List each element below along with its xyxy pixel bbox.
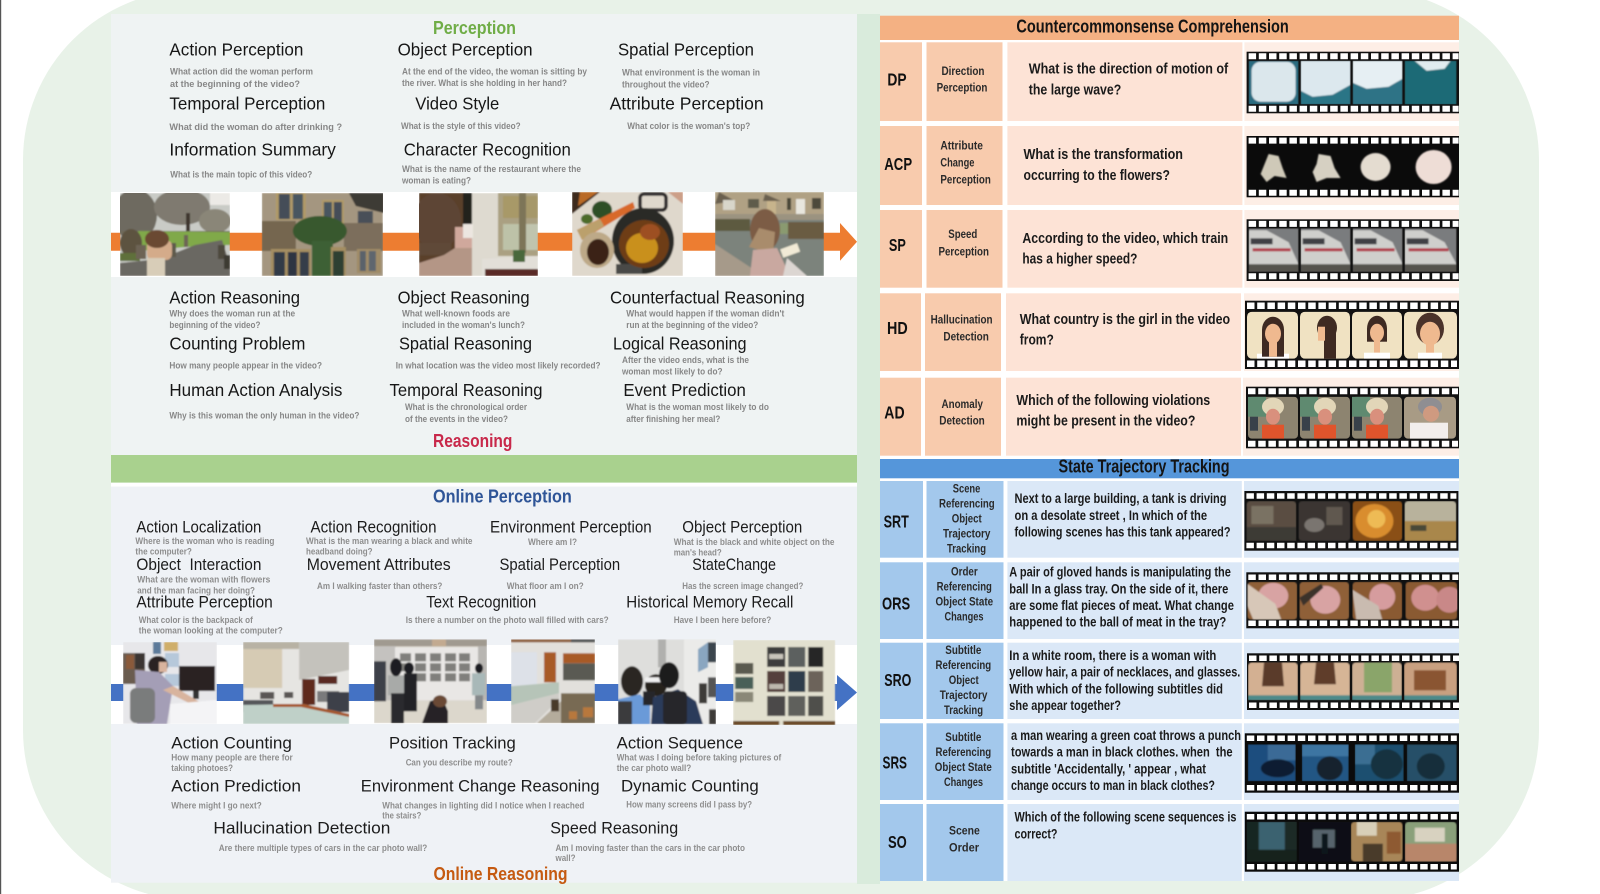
- task: Attribute Perception online: What color is the backpack of: [139, 614, 254, 625]
- row: SRO: Trajectory: [940, 688, 988, 702]
- row: ORS: Referencing: [937, 580, 992, 594]
- header: Countercommonsense Comprehension: [880, 16, 1459, 40]
- row: SO: [880, 804, 1459, 881]
- task: Action Perception: [169, 40, 313, 90]
- task: Object Perception online: Object Perception: [682, 519, 802, 537]
- row: ORS: are some flat pieces of meat. What change: [1009, 598, 1234, 613]
- task: Spatial Perception: [618, 40, 760, 91]
- task: Information Summary: [169, 140, 336, 181]
- task: Environment Change Reasoning: the stairs?: [382, 810, 422, 821]
- task: Action Perception: at the beginning of the video?: [170, 79, 300, 90]
- row: ACP: ACP: [884, 154, 912, 174]
- task: Speed Reasoning: Speed Reasoning: [550, 819, 678, 837]
- photo: group viewed from behind: [618, 639, 716, 724]
- panel: offline perception and reasoning: [111, 14, 857, 455]
- task: Event Prediction: [623, 380, 769, 425]
- film strip: selfie woman frames: [1246, 387, 1459, 448]
- header: State Trajectory Tracking: State Trajectory Tracking: [1058, 456, 1230, 476]
- row: SRS: a man wearing a green coat throws a punch: [1011, 728, 1241, 743]
- film strip: blue fight scene frames: [1245, 733, 1459, 793]
- task: Environment Change Reasoning: [361, 777, 600, 821]
- task: Attribute Perception online: [136, 593, 283, 636]
- row: SRO: she appear together?: [1009, 698, 1121, 713]
- row: SRT: Referencing: [939, 496, 995, 510]
- task: Speed Reasoning: wall?: [555, 852, 576, 863]
- task: Speed Reasoning: Am I moving faster than the cars in the car photo: [556, 842, 745, 853]
- task: Object Reasoning: Object Reasoning: [398, 288, 530, 308]
- task: Event Prediction: Event Prediction: [623, 380, 746, 400]
- row: ACP: [880, 126, 1459, 205]
- row: SRO: Tracking: [944, 703, 983, 717]
- task: Action Recognition: What is the man wearing a black and white: [306, 535, 472, 546]
- row: SP: Speed: [948, 227, 977, 241]
- task: Object Interaction: and the man facing her doing?: [137, 584, 255, 595]
- row: AD: [880, 378, 1459, 456]
- row: SO: Order: [949, 840, 979, 854]
- row: DP: Direction: [942, 64, 984, 78]
- task: Event Prediction: What is the woman most likely to do: [626, 402, 769, 413]
- task: Object Perception: [398, 40, 588, 89]
- row: HD: HD: [887, 318, 908, 338]
- task: Action Counting: [171, 735, 293, 773]
- task: Character Recognition: [401, 140, 581, 187]
- film strip: woman in tops frames: [1247, 653, 1459, 710]
- photo: atrium with stairs: [511, 639, 595, 724]
- row: SO: Scene: [949, 824, 980, 838]
- photo: woman drinking by window: [419, 193, 538, 276]
- row: SP: [880, 210, 1459, 288]
- heading: Perception: Perception: [433, 18, 516, 38]
- task: Attribute Perception online: Attribute Perception: [136, 593, 273, 611]
- task: Video Style: [401, 94, 521, 132]
- row: ORS: Changes: [944, 610, 984, 624]
- row: DP: What is the direction of motion of: [1029, 60, 1229, 77]
- task: Spatial Reasoning: [396, 334, 601, 372]
- row: HD: What country is the girl in the video: [1020, 311, 1230, 328]
- task: Spatial Perception: throughout the video?: [622, 80, 710, 91]
- row: SRO: [880, 643, 1459, 719]
- row: SP: has a higher speed?: [1022, 250, 1137, 267]
- heading: Online Perception: Online Perception: [433, 487, 572, 507]
- task: Action Perception: What action did the woman perform: [170, 67, 313, 78]
- task: Object Perception online: [674, 519, 834, 558]
- row: AD: Which of the following violations: [1016, 392, 1210, 409]
- task: Information Summary: What is the main topic of this video?: [170, 170, 312, 181]
- row: DP: Perception: [937, 81, 987, 95]
- task: Object Perception online: man's head?: [674, 547, 722, 558]
- task: Object Perception: Object Perception: [398, 40, 533, 60]
- task: Position Tracking: [389, 735, 516, 768]
- task: Action Sequence: Action Sequence: [617, 735, 743, 753]
- task: Action Localization: the computer?: [135, 546, 192, 557]
- task: Logical Reasoning: woman most likely to do?: [621, 367, 723, 378]
- row: ACP: Perception: [940, 172, 991, 186]
- row: SRO: SRO: [884, 670, 911, 690]
- task: Historical Memory Recall: Historical Memory Recall: [626, 593, 793, 611]
- task: Spatial Perception online: Spatial Perception: [500, 556, 620, 574]
- row: ORS: happened to the ball of meat in the tray?: [1009, 615, 1226, 630]
- task: Video Style: What is the style of this video?: [401, 121, 521, 132]
- row: DP: the large wave?: [1029, 81, 1121, 98]
- row: AD: might be present in the video?: [1016, 413, 1195, 430]
- task: Object Reasoning: [398, 288, 530, 331]
- photo: woman running in park: [120, 193, 230, 276]
- task: Text Recognition: Text Recognition: [426, 593, 536, 611]
- task: Hallucination Detection: Hallucination Detection: [213, 819, 390, 837]
- photo: woman at computer: [123, 642, 217, 724]
- row: SO: correct?: [1014, 827, 1058, 842]
- film strip: scene order frames: [1245, 812, 1459, 872]
- row: HD: [880, 293, 1459, 371]
- timeline strip: online video frames: [111, 639, 857, 725]
- task: Action Recognition: headband doing?: [306, 546, 373, 557]
- row: SRS: change occurs to man in black clothes?: [1011, 778, 1215, 793]
- panel: Countercommonsense Comprehension table: [880, 16, 1459, 459]
- task: Action Reasoning: Action Reasoning: [169, 288, 300, 308]
- row: SRO: Subtitle: [945, 643, 982, 657]
- task: Action Counting: How many people are there for: [171, 751, 293, 762]
- task: Position Tracking: Position Tracking: [389, 735, 516, 753]
- task: Hallucination Detection: Are there multiple types of cars in the car photo wall?: [219, 842, 428, 853]
- header: State Trajectory Tracking: [880, 456, 1459, 478]
- task: Counterfactual Reasoning: [610, 288, 805, 331]
- task: Counting Problem: [169, 334, 322, 372]
- row: SO: Which of the following scene sequences is: [1014, 810, 1236, 825]
- row: SRT: Next to a large building, a tank is driving: [1014, 491, 1226, 506]
- task: Action Sequence: What was I doing before taking pictures of: [617, 751, 782, 762]
- task: Text Recognition: Is there a number on the photo wall filled with cars?: [406, 614, 609, 625]
- row: SRS: [880, 723, 1459, 800]
- task: Action Sequence: the car photo wall?: [617, 762, 692, 773]
- task: Character Recognition: Character Recognition: [404, 140, 571, 160]
- task: Dynamic Counting: [621, 777, 759, 810]
- row: SRS: subtitle 'Accidentally, ' appear , what: [1011, 761, 1206, 776]
- task: Historical Memory Recall: Have I been here before?: [674, 614, 772, 625]
- row: ORS: Order: [951, 565, 978, 579]
- row: ORS: A pair of gloved hands is manipulating the: [1009, 565, 1231, 580]
- task: Action Reasoning: Why does the woman run at the: [169, 309, 295, 320]
- task: Action Reasoning: [169, 288, 300, 331]
- task: StateChange: StateChange: [692, 556, 776, 574]
- task: Action Sequence: [617, 735, 782, 773]
- row: SRT: Trajectory: [943, 526, 991, 540]
- photo: gallery atrium: [243, 642, 350, 724]
- row: SRT: on a desolate street , In which of the: [1014, 508, 1208, 523]
- task: Movement Attributes: [307, 556, 451, 591]
- task: Action Reasoning: beginning of the video?: [169, 320, 261, 331]
- row: SO: SO: [888, 832, 907, 852]
- film strip: wave frames: [1247, 52, 1459, 113]
- arrow: blue timeline: [111, 675, 857, 710]
- film strip: train frames: [1247, 219, 1459, 281]
- task: Dynamic Counting: Dynamic Counting: [621, 777, 759, 795]
- task: Object Interaction: What are the woman with flowers: [137, 574, 270, 585]
- task: Action Localization: Where is the woman who is reading: [135, 535, 275, 546]
- task: Temporal Reasoning: of the events in the video?: [405, 414, 508, 425]
- photo: stone cottage with ivy: [262, 193, 383, 276]
- row: AD: Anomaly: [942, 397, 983, 411]
- task: Attribute Perception: Attribute Perception: [610, 94, 764, 114]
- row: SRO: In a white room, there is a woman with: [1009, 648, 1216, 663]
- task: Counting Problem: Counting Problem: [169, 334, 305, 354]
- panel: State Trajectory Tracking table: [880, 456, 1462, 881]
- task: Speed Reasoning: [550, 819, 745, 863]
- task: Character Recognition: What is the name of the restaurant where the: [402, 164, 581, 175]
- row: SRS: Changes: [944, 775, 983, 789]
- row: ORS: Object State: [936, 595, 993, 609]
- row: ACP: occurring to the flowers?: [1024, 167, 1170, 184]
- row: DP: [880, 42, 1459, 121]
- task: Temporal Perception: What did the woman do after drinking ?: [169, 122, 342, 133]
- task: Action Recognition: Action Recognition: [310, 519, 436, 537]
- task: Attribute Perception: [610, 94, 764, 132]
- task: Spatial Reasoning: Spatial Reasoning: [399, 334, 532, 354]
- task: Hallucination Detection: [213, 819, 428, 853]
- photo: visitors at photo wall: [374, 639, 487, 724]
- task: Action Prediction: Where might I go next?: [171, 799, 262, 810]
- heading: Online Reasoning: Online Reasoning: [434, 864, 568, 884]
- row: AD: Detection: [939, 414, 985, 428]
- task: Temporal Perception: Temporal Perception: [169, 94, 325, 114]
- task: Position Tracking: Can you describe my route?: [406, 757, 513, 768]
- task: Spatial Reasoning: In what location was the video most likely recorded?: [396, 361, 601, 372]
- task: Attribute Perception online: the woman looking at the computer?: [139, 625, 283, 636]
- task: Counterfactual Reasoning: run at the beginning of the video?: [626, 320, 758, 331]
- task: Environment Change Reasoning: What changes in lighting did I notice when I reached: [382, 799, 585, 810]
- task: Counterfactual Reasoning: What would happen if the woman didn't: [626, 309, 785, 320]
- row: SRO: Referencing: [936, 658, 991, 672]
- row: HD: from?: [1020, 332, 1054, 349]
- task: Text Recognition: [406, 593, 609, 625]
- row: SRT: following scenes has this tank appeared?: [1014, 525, 1230, 540]
- film strip: cartoon girl frames: [1245, 301, 1459, 369]
- row: HD: Detection: [943, 329, 989, 343]
- row: SRS: SRS: [882, 753, 907, 773]
- task: Object Perception: At the end of the video, the woman is sitting by: [402, 67, 588, 78]
- arrow: orange timeline: [111, 223, 857, 261]
- task: StateChange: [682, 556, 804, 591]
- row: SRO: yellow hair, a pair of necklaces, and glasses.: [1009, 665, 1240, 680]
- task: Human Action Analysis: [169, 380, 360, 422]
- row: SRT: Scene: [953, 481, 981, 495]
- task: Environment Change Reasoning: Environment Change Reasoning: [361, 777, 600, 795]
- task: Temporal Reasoning: Temporal Reasoning: [390, 380, 542, 400]
- task: Counting Problem: How many people appear in the video?: [169, 361, 322, 372]
- task: Video Style: Video Style: [415, 94, 499, 114]
- row: DP: DP: [887, 70, 907, 90]
- row: SRO: Object: [949, 673, 979, 687]
- task: Human Action Analysis: Why is this woman the only human in the video?: [169, 411, 360, 422]
- row: SP: SP: [889, 235, 906, 255]
- row: HD: Hallucination: [931, 313, 993, 327]
- task: Temporal Perception: [169, 94, 342, 133]
- header: Countercommonsense Comprehension: Countercommonsense Comprehension: [1016, 16, 1289, 36]
- task: Action Localization: [135, 519, 275, 557]
- task: StateChange: Has the screen image changed?: [682, 580, 804, 591]
- task: Environment Perception: [490, 519, 652, 547]
- row: ORS: ball In a glass tray. On the side of it, there: [1009, 581, 1229, 596]
- task: Spatial Perception: Spatial Perception: [618, 40, 754, 60]
- row: AD: AD: [884, 402, 905, 422]
- task: Object Interaction: [136, 556, 270, 595]
- task: Information Summary: Information Summary: [169, 140, 336, 160]
- task: Temporal Reasoning: [390, 380, 542, 425]
- task: Human Action Analysis: Human Action Analysis: [169, 380, 343, 400]
- row: ACP: Change: [940, 156, 975, 170]
- task: Character Recognition: woman is eating?: [401, 176, 471, 187]
- task: Movement Attributes: Am I walking faster than others?: [317, 580, 443, 591]
- task: Logical Reasoning: Logical Reasoning: [613, 334, 746, 354]
- task: Event Prediction: after finishing her meal?: [626, 414, 720, 425]
- task: Environment Perception: Environment Perception: [490, 519, 652, 537]
- task: Action Counting: Action Counting: [171, 735, 292, 753]
- task: Action Counting: taking photoes?: [171, 762, 233, 773]
- row: ACP: What is the transformation: [1024, 146, 1183, 163]
- task: Spatial Perception online: [500, 556, 620, 591]
- film strip: tank scene frames: [1244, 491, 1458, 551]
- task: Object Perception: the river. What is she holding in her hand?: [402, 78, 567, 89]
- task: Movement Attributes: Movement Attributes: [307, 556, 451, 574]
- task: Object Reasoning: What well-known foods are: [402, 309, 510, 320]
- task: Action Prediction: [171, 777, 301, 810]
- row: SP: According to the video, which train: [1022, 230, 1228, 247]
- task: Counterfactual Reasoning: Counterfactual Reasoning: [610, 288, 805, 308]
- row: SRT: SRT: [884, 512, 909, 532]
- heading: Reasoning: Reasoning: [433, 431, 512, 451]
- row: SRS: towards a man in black clothes. when the: [1011, 745, 1233, 760]
- task: Logical Reasoning: After the video ends, what is the: [622, 355, 749, 366]
- timeline strip: offline video frames: [111, 189, 857, 277]
- photo: wall of car photographs: [733, 640, 836, 725]
- task: Logical Reasoning: [613, 334, 749, 378]
- task: Action Perception: Action Perception: [169, 40, 303, 60]
- task: Action Prediction: Action Prediction: [171, 777, 301, 795]
- task: Temporal Reasoning: What is the chronological order: [405, 402, 527, 413]
- row: SP: Perception: [938, 245, 989, 259]
- task: Spatial Perception: What environment is the woman in: [622, 68, 760, 79]
- task: Action Recognition: [306, 519, 472, 557]
- film strip: gloved hands and meat frames: [1246, 572, 1462, 628]
- panel: online perception and reasoning: [111, 487, 857, 884]
- row: SRS: Object State: [935, 760, 992, 774]
- task: Spatial Perception online: What floor am I on?: [507, 580, 584, 591]
- row: SRT: [880, 481, 1459, 558]
- task: Object Reasoning: included in the woman's lunch?: [402, 320, 525, 331]
- row: SRS: Subtitle: [945, 730, 982, 744]
- task: Attribute Perception: What color is the woman's top?: [627, 121, 750, 132]
- row: ORS: ORS: [882, 593, 910, 613]
- row: SRT: Tracking: [947, 541, 986, 555]
- photo: lunch in skillet: [572, 192, 683, 276]
- row: SRT: Object: [952, 511, 982, 525]
- divider band: [111, 455, 857, 483]
- row: ACP: Attribute: [940, 138, 983, 152]
- film strip: flower frames: [1247, 136, 1459, 197]
- row: SRO: With which of the following subtitles did: [1009, 681, 1223, 696]
- task: Object Perception online: What is the black and white object on the: [674, 536, 834, 547]
- task: Object Interaction: Object Interaction: [136, 556, 261, 574]
- photo: woman reading by river: [715, 192, 824, 276]
- task: Historical Memory Recall: [626, 593, 793, 625]
- row: SRS: Referencing: [936, 745, 991, 759]
- row: ORS: [880, 562, 1462, 639]
- task: Environment Perception: Where am I?: [528, 536, 577, 547]
- task: Dynamic Counting: How many screens did I pass by?: [626, 799, 752, 810]
- task: Action Localization: Action Localization: [136, 519, 261, 537]
